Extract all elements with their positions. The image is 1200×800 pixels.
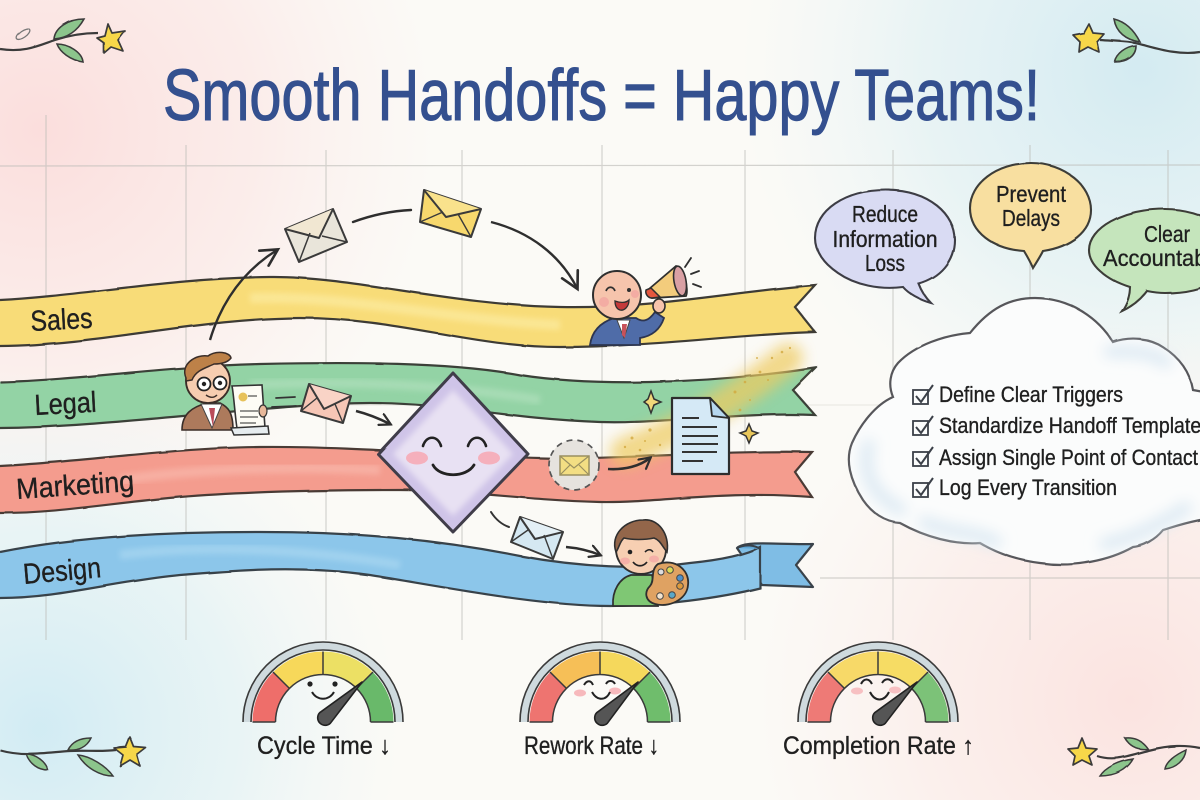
vine: bottom right (1068, 738, 1200, 776)
speech bubble: Clear Accountability (1089, 209, 1200, 311)
gauge label: Completion Rate: Completion Rate ↑ (783, 732, 974, 760)
gauge label: Cycle Time: Cycle Time ↓ (257, 732, 391, 760)
eyes (423, 438, 486, 446)
ribbon label: Sales: Sales (30, 303, 93, 338)
bubble text: Prevent Delays: Prevent (996, 181, 1067, 207)
decision diamond with smiling face (378, 373, 528, 532)
icon: blue envelope (511, 517, 563, 559)
bubble text: Reduce Information Loss: Reduce (852, 201, 918, 227)
bubble text: Reduce Information Loss (832, 201, 938, 276)
bubble text: Prevent Delays (996, 181, 1067, 231)
bubble text: Reduce Information Loss: Loss (865, 250, 905, 276)
cheeks (406, 452, 428, 464)
ribbon: Sales (0, 277, 815, 347)
arrow: blue envelope to designer (566, 547, 600, 555)
icon: document (672, 398, 729, 474)
arrow: Legal up to grey envelope (210, 250, 277, 340)
ribbon label: Marketing: Marketing (15, 466, 135, 506)
arrow: grey to yellow envelope (353, 210, 411, 222)
checklist item 4: Log Every Transition (939, 475, 1117, 500)
right cheek (478, 452, 500, 464)
bubble text: Clear Accountability: Clear (1144, 221, 1190, 247)
character: designer with palette (613, 520, 688, 606)
vine: bottom left (0, 737, 146, 776)
gauge: Cycle Time (243, 642, 403, 760)
vine: top left (0, 19, 125, 62)
cloud checklist (849, 298, 1200, 565)
icon: sparkle left (644, 391, 661, 413)
ribbon: Design (0, 532, 813, 606)
character: Legal person with glasses (182, 352, 233, 430)
arrow: yellow envelope to Sales person (491, 222, 577, 288)
bubble text: Reduce Information Loss: Information (832, 226, 938, 252)
ribbon label: Design: Design (22, 552, 102, 591)
ribbon label: Legal: Legal (34, 387, 97, 422)
character: Sales person with megaphone (590, 258, 701, 345)
gauge label: Rework Rate: Rework Rate ↓ (524, 732, 659, 760)
icon: grey envelope (285, 209, 347, 262)
bubble text: Prevent Delays: Delays (1002, 205, 1060, 231)
vine: top right (1073, 19, 1200, 62)
dashes: scroll to pink envelope (272, 397, 296, 407)
ribbon: Legal (0, 363, 815, 428)
gold dust (624, 347, 791, 452)
dash: diamond to blue envelope (491, 512, 509, 527)
gauge: Rework Rate (520, 642, 680, 760)
icon: yellow envelope (420, 190, 481, 237)
icon: legal scroll (231, 385, 269, 435)
arrow: pink envelope to diamond (356, 411, 390, 424)
icon: sparkle right (740, 424, 758, 443)
bubble text: Clear Accountability (1103, 221, 1200, 271)
icon: pink envelope (301, 384, 351, 423)
speech bubble: Reduce Information Loss (815, 190, 955, 303)
checklist item 1: Define Clear Triggers (939, 382, 1123, 407)
smile (433, 465, 474, 475)
arrow: to document (608, 458, 650, 469)
gauge: Completion Rate (783, 642, 974, 760)
speech bubble: Prevent Delays (970, 163, 1091, 268)
ribbon: Marketing (0, 447, 812, 513)
icon: yellow envelope in dashed circle (549, 440, 599, 490)
